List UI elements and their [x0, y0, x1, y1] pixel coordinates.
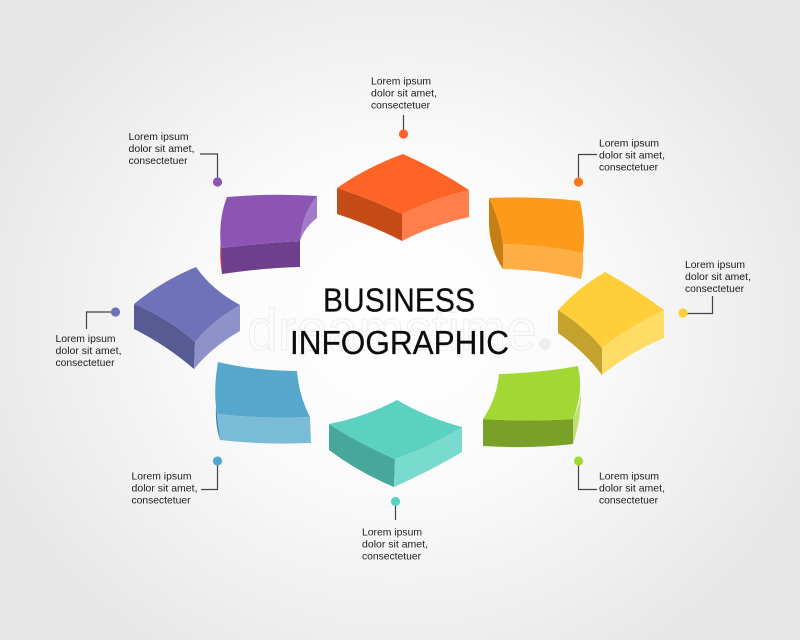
callout: bottom: dolor sit amet,	[362, 538, 428, 550]
segment: blue	[215, 362, 311, 444]
segment: green	[483, 366, 581, 447]
callout: lower left: consectetuer	[132, 494, 191, 506]
callout: left	[56, 307, 122, 369]
watermark: dreamstime	[247, 298, 537, 363]
callout: upper left: dolor sit amet,	[128, 143, 194, 155]
callout: bottom	[362, 497, 428, 562]
callout: upper left: Lorem ipsum	[128, 131, 189, 143]
callout: top: consectetuer	[371, 100, 430, 112]
title: BUSINESS	[323, 282, 475, 318]
callout: lower right	[574, 456, 665, 506]
callout: top: Lorem ipsum	[371, 76, 431, 88]
callout: left: dolor sit amet,	[56, 345, 122, 357]
callout: bottom: Lorem ipsum	[362, 526, 422, 538]
callout: top	[371, 76, 437, 139]
callout: left: consectetuer	[56, 357, 115, 369]
callout: upper right: dolor sit amet,	[599, 150, 665, 162]
segment: purple	[220, 195, 317, 274]
callout: right: Lorem ipsum	[685, 259, 745, 271]
callout: right: consectetuer	[685, 283, 744, 295]
callout: lower right: dolor sit amet,	[599, 482, 665, 494]
callout: lower right: consectetuer	[599, 494, 658, 506]
callout: upper left	[128, 131, 222, 187]
callout: bottom: consectetuer	[362, 550, 421, 562]
callout: upper right	[574, 138, 665, 187]
callout: lower right: Lorem ipsum	[599, 470, 659, 482]
callout: upper left: consectetuer	[128, 155, 188, 167]
segment: orange	[489, 197, 584, 279]
segment: indigo	[134, 267, 240, 369]
callout: right: dolor sit amet,	[685, 271, 751, 283]
callout: lower left	[132, 456, 222, 506]
callout: upper right: consectetuer	[599, 162, 658, 174]
callout: right	[678, 259, 751, 318]
segment: teal	[329, 400, 462, 487]
callout: lower left: dolor sit amet,	[132, 482, 198, 494]
callout: upper right: Lorem ipsum	[599, 138, 659, 150]
callout: top: dolor sit amet,	[371, 88, 437, 100]
title: INFOGRAPHIC	[290, 324, 509, 361]
callout: left: Lorem ipsum	[56, 333, 116, 345]
title	[290, 282, 509, 361]
callout: lower left: Lorem ipsum	[132, 470, 192, 482]
segment: red-orange	[337, 154, 469, 241]
segment: yellow	[558, 272, 664, 375]
